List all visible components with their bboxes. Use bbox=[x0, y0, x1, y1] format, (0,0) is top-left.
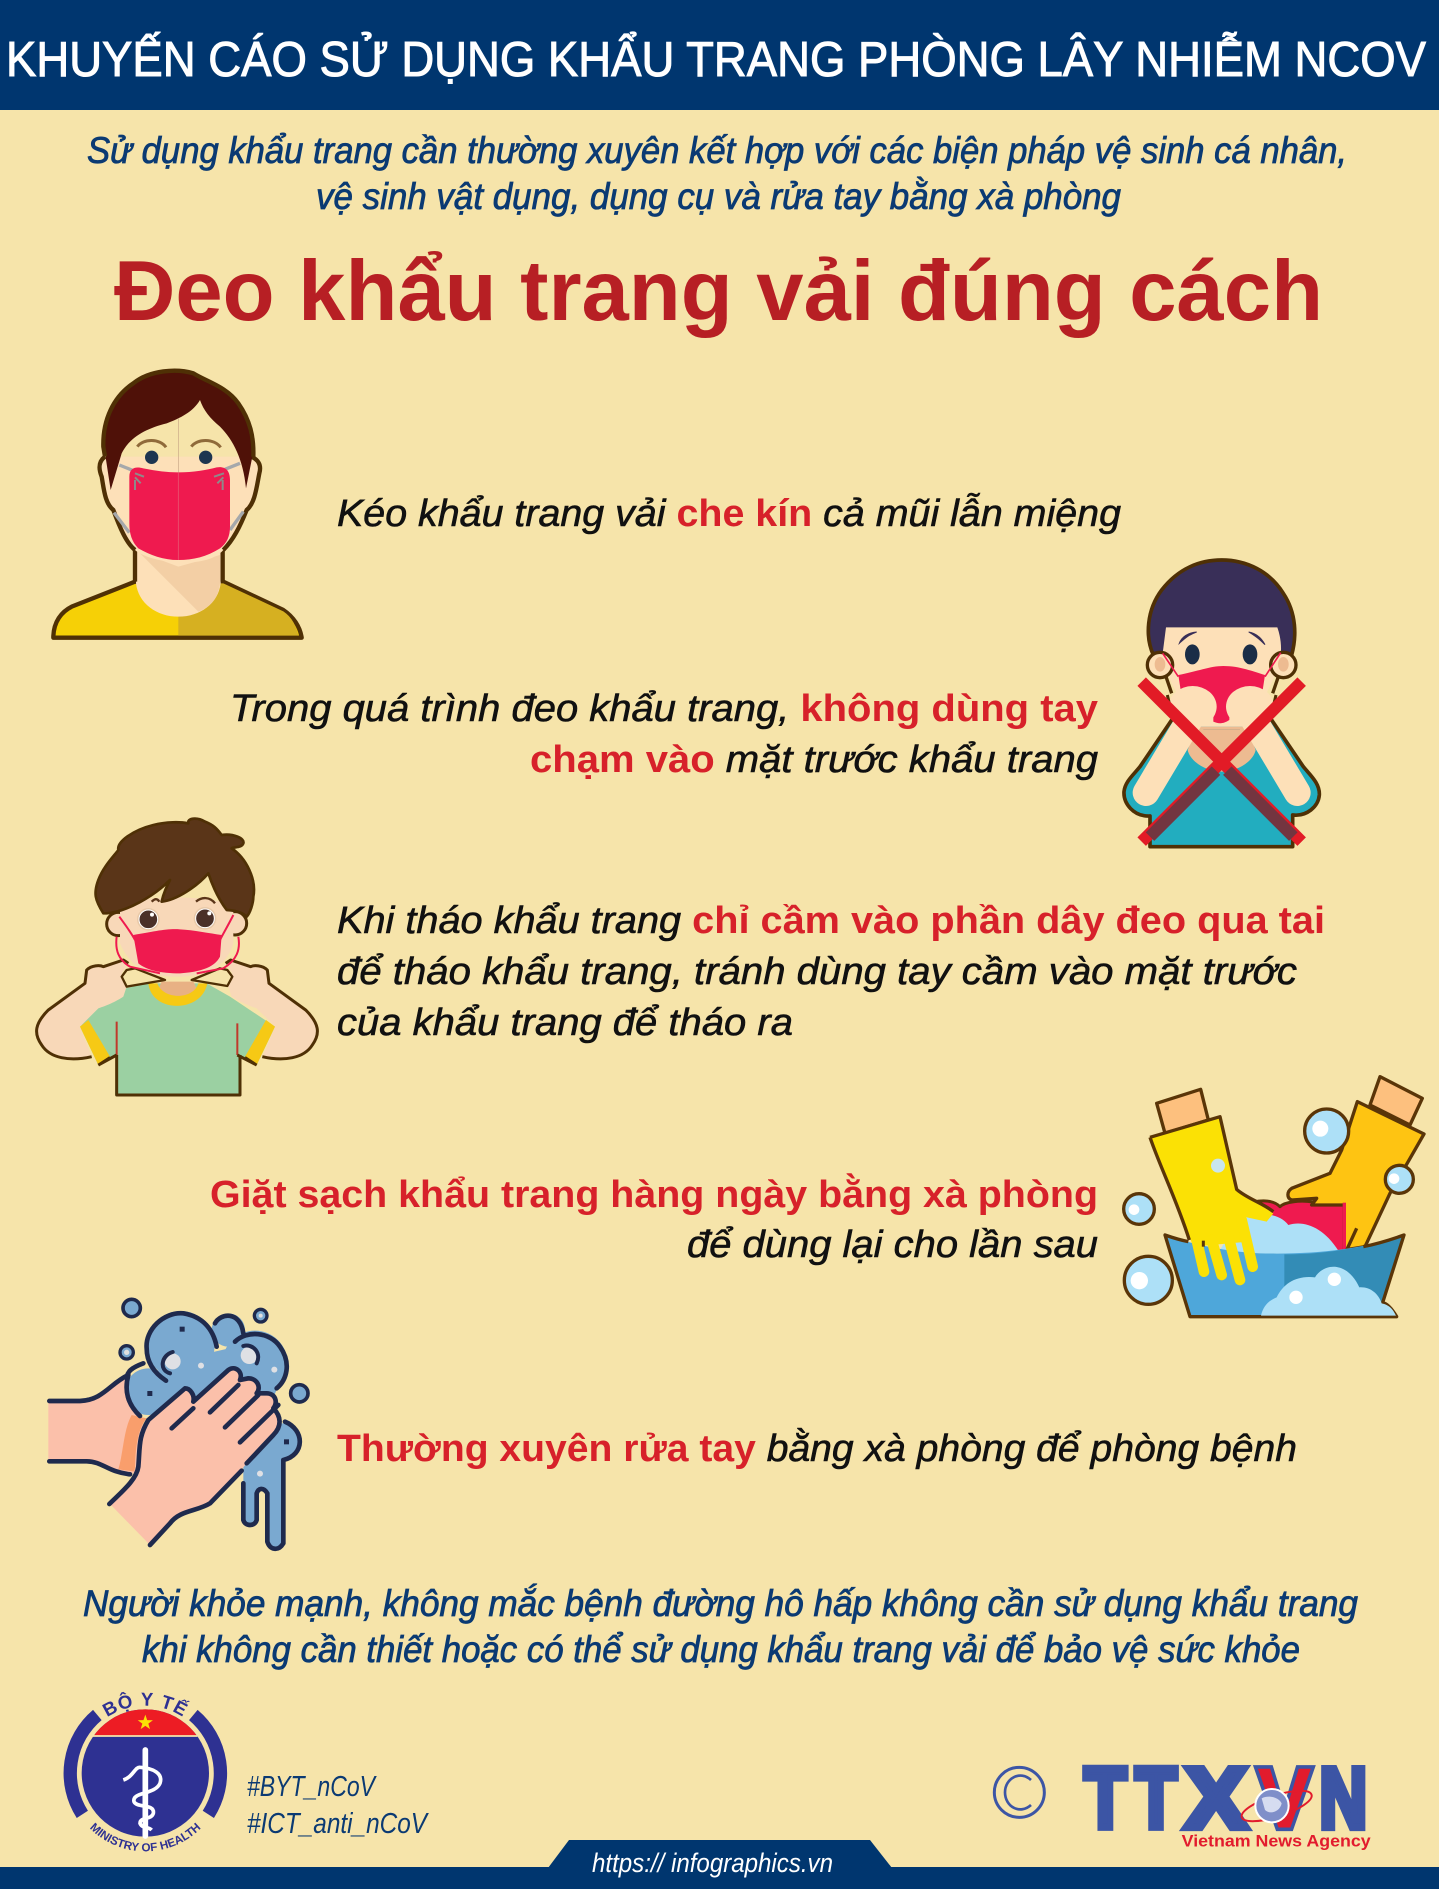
foam bbox=[1261, 1267, 1396, 1316]
left glove bbox=[1157, 1089, 1208, 1133]
red cross bbox=[1142, 682, 1302, 842]
icon: washing mask in basin bbox=[1124, 1077, 1424, 1317]
intro text bbox=[87, 130, 1347, 217]
icon: hands washing with soap bbox=[48, 1299, 308, 1549]
back hand bbox=[48, 1375, 143, 1473]
hashtags bbox=[247, 1771, 429, 1840]
closing note: Người khỏe mạnh, không mắc bệnh đường hô hấp không cần sử dụng khẩu trang bbox=[83, 1583, 1358, 1624]
hair bbox=[96, 819, 254, 917]
copyright and TTXVN logo bbox=[994, 1751, 1371, 1851]
closing note bbox=[83, 1583, 1358, 1670]
icon: man wearing mask bbox=[53, 371, 302, 638]
icon: child not touching mask, crossed out bbox=[1124, 560, 1319, 847]
soap bubbles bbox=[1305, 1109, 1349, 1153]
instruction 1 text: Kéo khẩu trang vải che kín cả mũi lẫn miệng bbox=[337, 492, 1121, 535]
instruction 3 text: của khẩu trang để tháo ra bbox=[337, 1002, 793, 1044]
mask bbox=[1178, 666, 1265, 723]
icon: boy removing mask by ear loops bbox=[37, 819, 317, 1095]
hashtags: #ICT_anti_nCoV bbox=[247, 1808, 429, 1840]
drips bbox=[243, 1422, 300, 1549]
mask bbox=[129, 467, 230, 560]
copyright and TTXVN logo: N bbox=[1320, 1751, 1367, 1846]
header band with title bbox=[0, 0, 1439, 110]
intro text: vệ sinh vật dụng, dụng cụ và rửa tay bằng xà phòng bbox=[316, 176, 1121, 217]
mask bbox=[133, 929, 222, 973]
hashtags: #BYT_nCoV bbox=[247, 1771, 377, 1803]
instruction 4 text: để dùng lại cho lần sau bbox=[687, 1224, 1098, 1266]
instruction 4 text: Giặt sạch khẩu trang hàng ngày bằng xà phòng bbox=[210, 1172, 1098, 1216]
instruction 5 text: Thường xuyên rửa tay bằng xà phòng để phòng bệnh bbox=[337, 1427, 1297, 1470]
main heading: Đeo khẩu trang vải đúng cách bbox=[114, 244, 1323, 339]
instruction 2 text: chạm vào mặt trước khẩu trang bbox=[530, 739, 1098, 781]
instruction 4 text bbox=[210, 1172, 1098, 1266]
copyright and TTXVN logo: V bbox=[1257, 1751, 1312, 1846]
right glove bbox=[1370, 1077, 1422, 1125]
instruction 3 text: Khi tháo khẩu trang chỉ cầm vào phần dây đeo qua tai bbox=[337, 900, 1325, 942]
copyright and TTXVN logo: T bbox=[1084, 1751, 1126, 1846]
right arm bbox=[226, 960, 317, 1059]
footer band with url bbox=[0, 1840, 1439, 1889]
copyright and TTXVN logo: X bbox=[1185, 1751, 1247, 1846]
instruction 3 text bbox=[337, 900, 1325, 1044]
intro text: Sử dụng khẩu trang cần thường xuyên kết hợp với các biện pháp vệ sinh cá nhân, bbox=[87, 130, 1347, 171]
copyright and TTXVN logo: Vietnam News Agency bbox=[1182, 1832, 1371, 1851]
closing note: khi không cần thiết hoặc có thể sử dụng khẩu trang vải để bảo vệ sức khỏe bbox=[142, 1629, 1300, 1670]
instruction 2 text bbox=[230, 688, 1098, 781]
front hand bbox=[110, 1368, 280, 1545]
instruction 3 text: để tháo khẩu trang, tránh dùng tay cầm vào mặt trước bbox=[337, 951, 1297, 993]
arms and hands bbox=[1146, 713, 1193, 793]
logo: Ministry of Health: MINISTRY OF HEALTH bbox=[90, 1822, 201, 1852]
copyright and TTXVN logo: T bbox=[1135, 1751, 1177, 1846]
logo: Ministry of Health bbox=[64, 1692, 228, 1852]
basin bbox=[1165, 1235, 1404, 1317]
instruction 2 text: Trong quá trình đeo khẩu trang, không dùng tay bbox=[230, 688, 1098, 730]
staff and snake bbox=[137, 1750, 154, 1836]
logo: Ministry of Health: BỘ Y TẾ bbox=[102, 1692, 190, 1716]
footer band with url: https:// infographics.vn bbox=[592, 1848, 833, 1878]
left arm bbox=[37, 960, 128, 1059]
